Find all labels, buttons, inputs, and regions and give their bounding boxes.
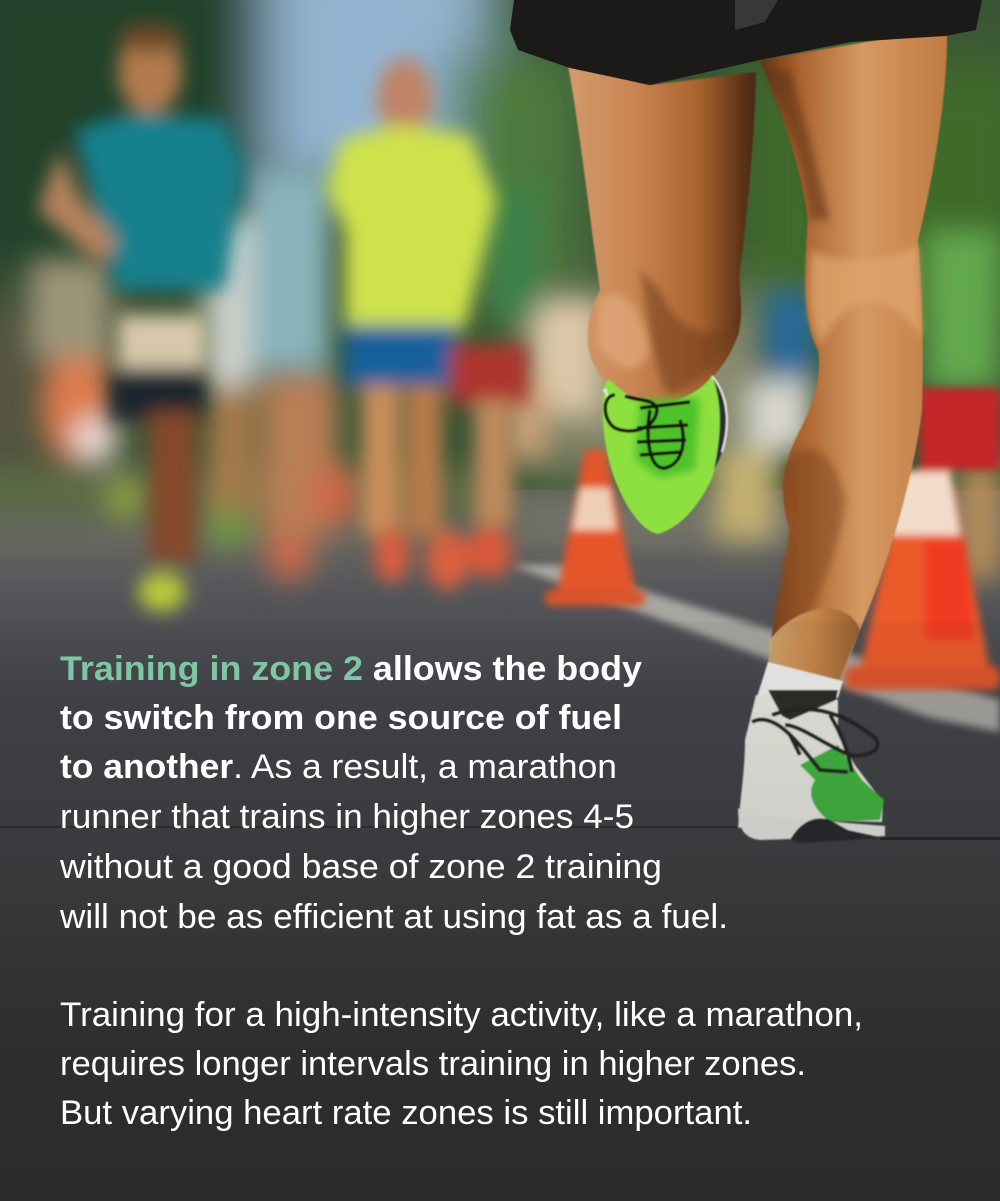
paragraph: marathon training — [60, 996, 863, 1132]
paragraph: marathon training: But varying heart rate zones is still important. — [60, 1094, 752, 1132]
paragraph: marathon training: requires longer intervals training in higher zones. — [60, 1045, 806, 1083]
traffic cone: small — [545, 450, 645, 606]
paragraph: zone 2 explanation: to switch from one source of fuel — [60, 699, 622, 737]
paragraph: zone 2 explanation — [59, 650, 728, 936]
paragraph: marathon training: Training for a high-intensity activity, like a marathon, — [60, 996, 863, 1034]
dark gradient overlay — [0, 622, 1000, 1201]
blurred runner: small background crowd — [30, 170, 1000, 581]
runner: standing leg — [760, 28, 947, 682]
blurred runner: teal shirt — [38, 24, 244, 612]
paragraph: zone 2 explanation: will not be as efficient at using fat as a fuel. — [59, 898, 728, 936]
runner: shorts — [510, 0, 982, 85]
paragraph: zone 2 explanation: runner that trains in higher zones 4-5 — [60, 798, 634, 836]
paragraph: zone 2 explanation: without a good base of zone 2 training — [59, 848, 662, 886]
runner: raised leg — [568, 66, 756, 404]
paragraph: zone 2 explanation: Training in zone 2 allows the body — [60, 650, 642, 688]
blurred runner: yellow shirt — [326, 58, 528, 590]
traffic cone: large — [845, 388, 1000, 690]
paragraph: zone 2 explanation: to another. As a result, a marathon — [60, 748, 617, 786]
horizon shadow lines — [0, 826, 740, 828]
runner: raised green shoe — [603, 375, 727, 534]
runner: planted green shoe — [738, 662, 885, 843]
